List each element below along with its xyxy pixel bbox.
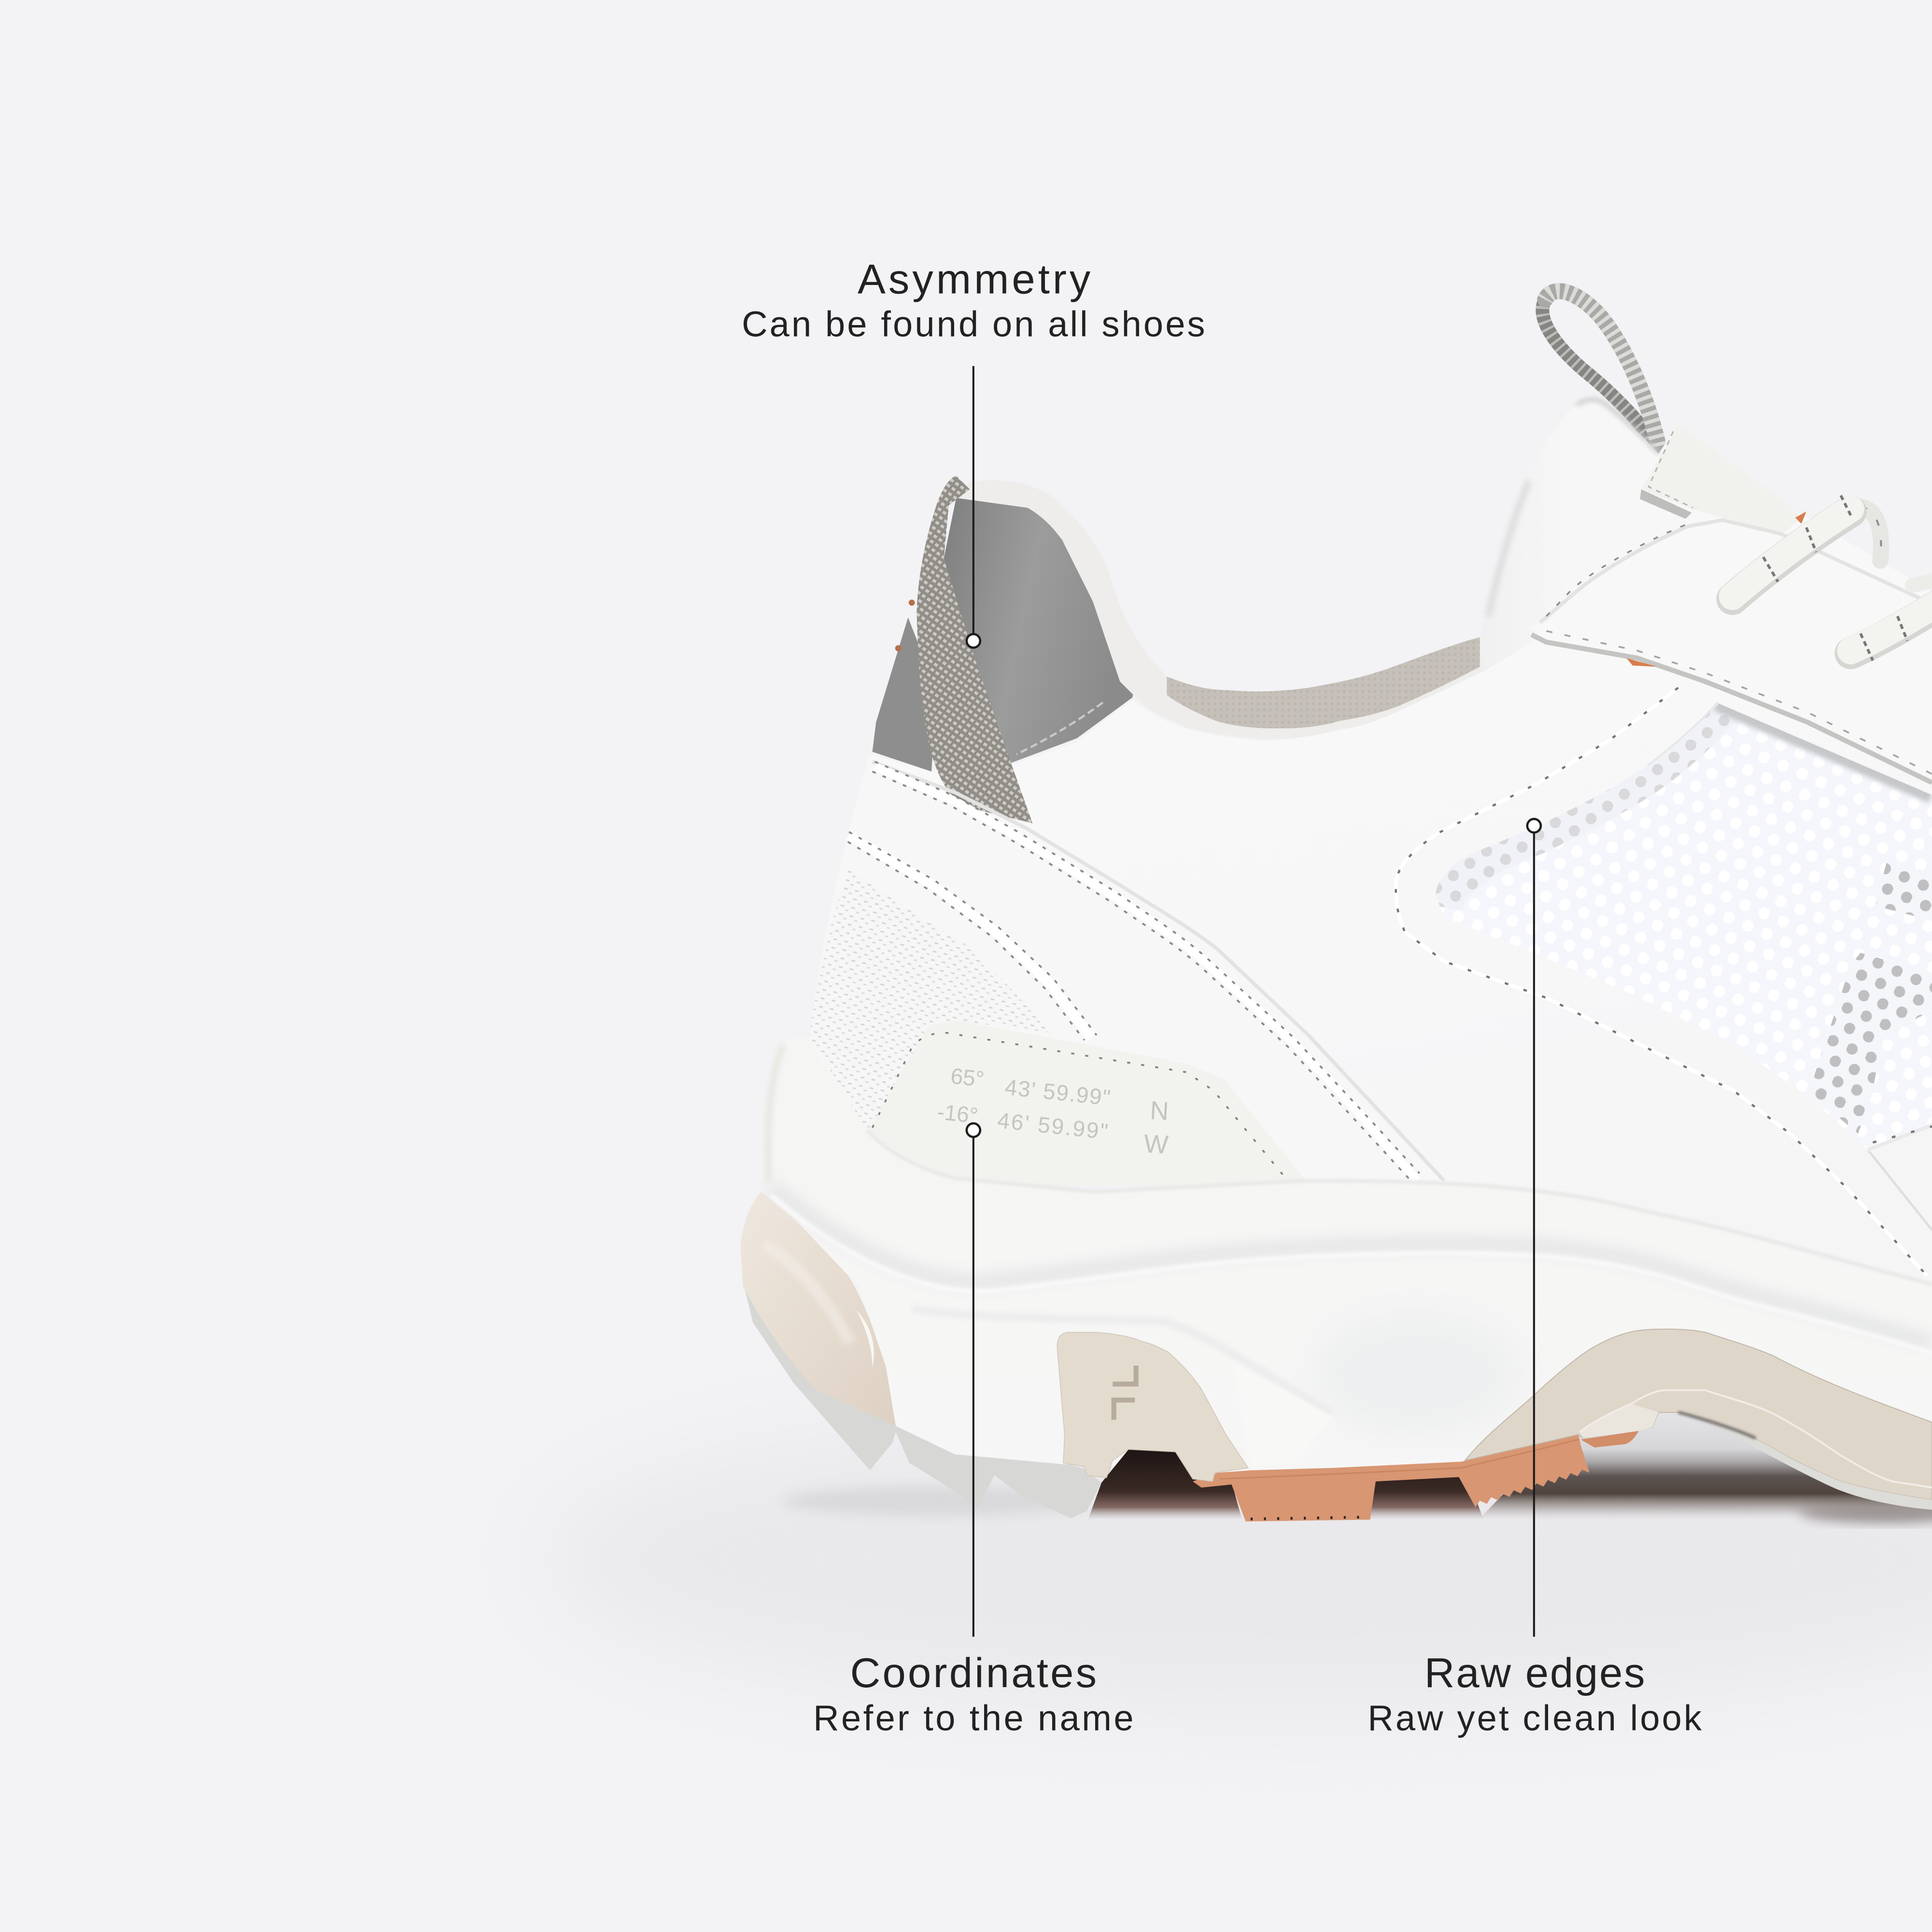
- outsole grey heel spikes: [743, 1282, 1101, 1519]
- reflective panel left: [873, 617, 936, 771]
- engraved coordinates text: 43' 59.99": [1004, 1074, 1112, 1110]
- ground shadow: [542, 1405, 1932, 1713]
- coordinates description: Refer to the name: [813, 1698, 1134, 1738]
- pull loop: [1542, 291, 1659, 446]
- infographic: annotated sneaker: [637, 265, 1932, 1738]
- webbing heel tab: [917, 476, 1032, 824]
- engraved coordinates text: N: [1149, 1096, 1170, 1126]
- midsole heel contour: [912, 1309, 1333, 1414]
- coordinates heading: Coordinates: [850, 1649, 1097, 1696]
- beige arch: [1465, 1329, 1932, 1510]
- callout: coordinates: [813, 1123, 1134, 1738]
- collar lining: [1167, 637, 1480, 728]
- tongue: [1480, 400, 1932, 789]
- midsole soft shading: [1312, 1313, 1522, 1436]
- midsole facet right of pod: [1232, 1362, 1333, 1466]
- asymmetry leader line: [973, 366, 974, 641]
- arch lower lip: [1579, 1404, 1659, 1438]
- orange ridge line: [1220, 1439, 1579, 1479]
- engraved coordinates text: W: [1143, 1129, 1169, 1159]
- mesh logo: [1809, 863, 1932, 1134]
- eyestay lace panel: [1529, 520, 1932, 782]
- callout: asymmetry: [742, 256, 1205, 648]
- orange stitch marks: [895, 599, 915, 652]
- orange lace accents: [1626, 511, 1806, 667]
- reflective panel stitching: [1016, 702, 1103, 754]
- raw edges marker: [1527, 819, 1541, 833]
- shoe illustration: [741, 291, 1932, 1521]
- coordinates leader line: [973, 1130, 974, 1637]
- tongue tab: [1641, 425, 1802, 534]
- logo mark: [1113, 1365, 1136, 1420]
- dark gap beneath heel pod: [1088, 1449, 1242, 1520]
- engraved coordinates text: 46' 59.99": [996, 1108, 1109, 1144]
- laces: [1733, 496, 1932, 661]
- perforated heel mesh: [809, 869, 1052, 1131]
- raw edges leader line: [1534, 826, 1535, 1637]
- asymmetry marker: [967, 634, 980, 648]
- raw edges description: Raw yet clean look: [1368, 1698, 1702, 1738]
- reflective panel right: [944, 498, 1135, 764]
- heel counter panel: [809, 754, 1444, 1180]
- lug teeth: [1251, 1517, 1363, 1519]
- coordinates marker: [967, 1123, 980, 1137]
- engraved coordinates text: [936, 1063, 1170, 1159]
- small orange fin: [1581, 1431, 1639, 1448]
- dark gap between orange lugs: [1355, 1473, 1483, 1520]
- shadow beneath arch: [1479, 1410, 1932, 1520]
- orange outsole: [1193, 1431, 1639, 1521]
- mesh edge shadow: [1436, 702, 1932, 906]
- midsole upper band crease: [771, 1186, 1932, 1343]
- midsole lower highlight: [771, 1195, 1932, 1353]
- raw edges heading: Raw edges: [1424, 1649, 1645, 1696]
- main upper leather: [809, 641, 1932, 1319]
- mesh window: [1436, 702, 1932, 1150]
- asymmetry description: Can be found on all shoes: [742, 304, 1205, 344]
- air bubble: [741, 1192, 896, 1426]
- collar band: [956, 480, 1481, 739]
- beige heel pod with logo: [1057, 1332, 1248, 1481]
- leather seam stitching: [1396, 688, 1932, 1276]
- coordinates patch: [867, 1021, 1306, 1186]
- asymmetry heading: Asymmetry: [858, 256, 1091, 302]
- engraved coordinates text: -16°: [936, 1099, 979, 1128]
- callout: raw edges: [1368, 819, 1702, 1738]
- midsole: [765, 1038, 1932, 1473]
- engraved coordinates text: 65°: [949, 1063, 986, 1092]
